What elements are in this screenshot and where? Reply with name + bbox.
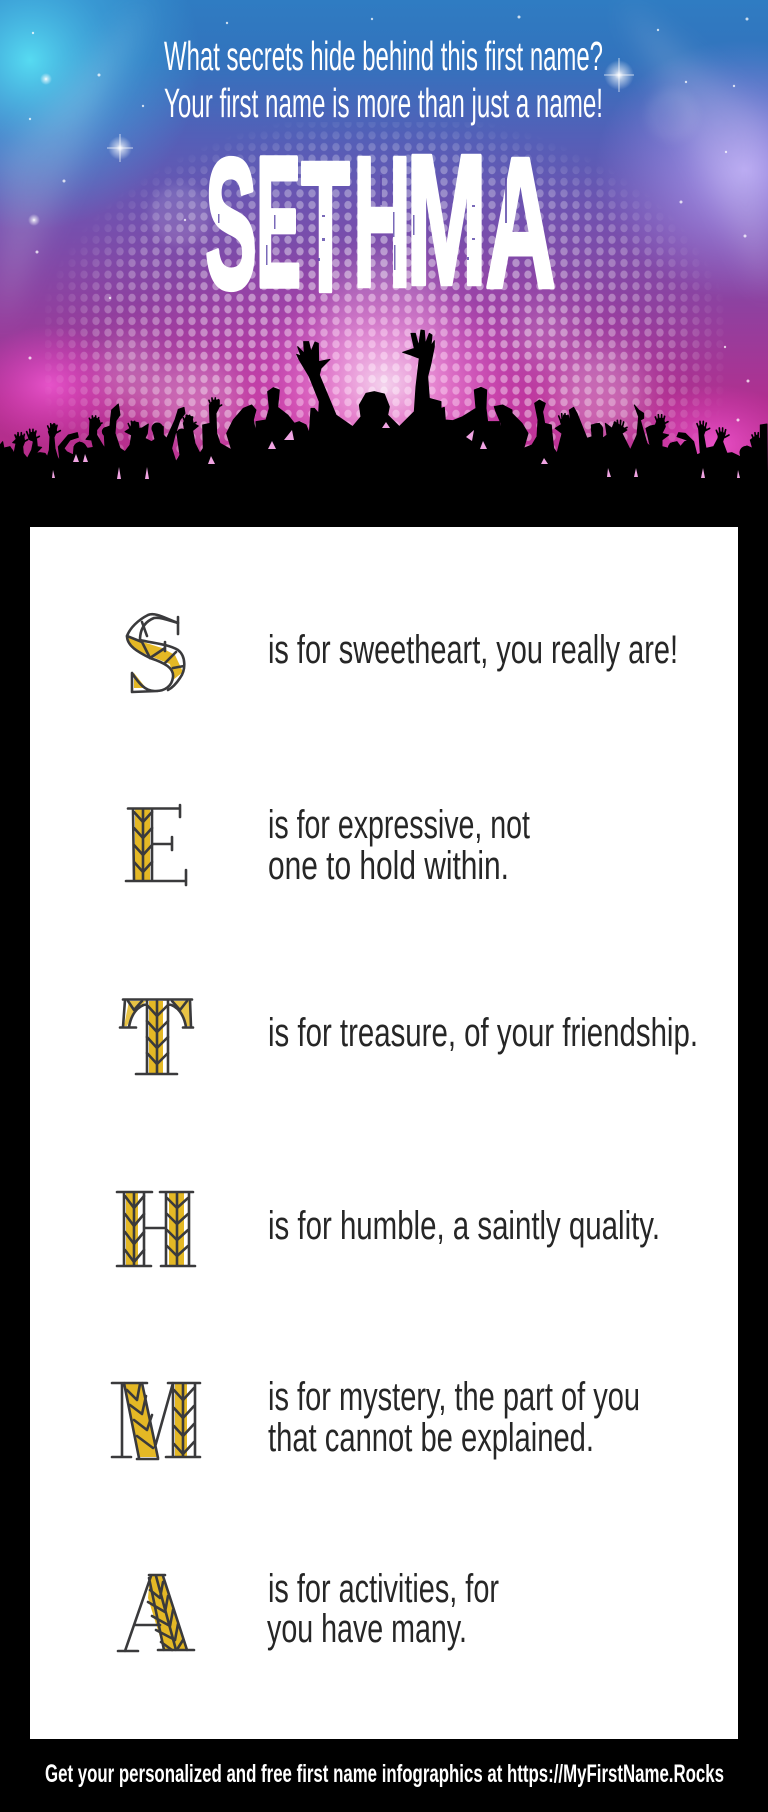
crowd silhouette [0,330,768,530]
text: A line 1: is for activities, for [268,1567,499,1611]
text: E line 2: one to hold within. [268,844,509,888]
LED dot grid [46,122,722,460]
name title: SETHMA: H [353,119,411,326]
row M [112,1375,640,1460]
text: A line 2: you have many. [267,1607,467,1651]
row S [127,614,678,692]
text: M line 2: that cannot be explained. [268,1416,594,1460]
name title: SETHMA: M [406,117,487,324]
icon: letter E [126,805,186,885]
row H [117,1192,660,1266]
icon: letter T [120,1000,193,1074]
name title: SETHMA [205,117,556,331]
name title: SETHMA: S [205,121,257,328]
header: concert stage backdrop [0,0,768,535]
row T [120,1000,698,1074]
row A [118,1567,499,1651]
icon: letter S [127,614,184,692]
icon: letter A [118,1575,194,1651]
sparkles [28,16,750,422]
white content panel [30,527,738,1739]
name title: SETHMA: T [301,124,350,331]
row E [126,803,530,888]
icon: letter M [112,1383,200,1459]
text: E line 1: is for expressive, not [268,803,530,847]
name title: SETHMA: A [485,120,556,327]
icon: letter H [117,1192,195,1266]
name title: SETHMA: E [256,119,301,326]
grunge specks on name [218,175,507,270]
text: M line 1: is for mystery, the part of you [268,1375,640,1419]
